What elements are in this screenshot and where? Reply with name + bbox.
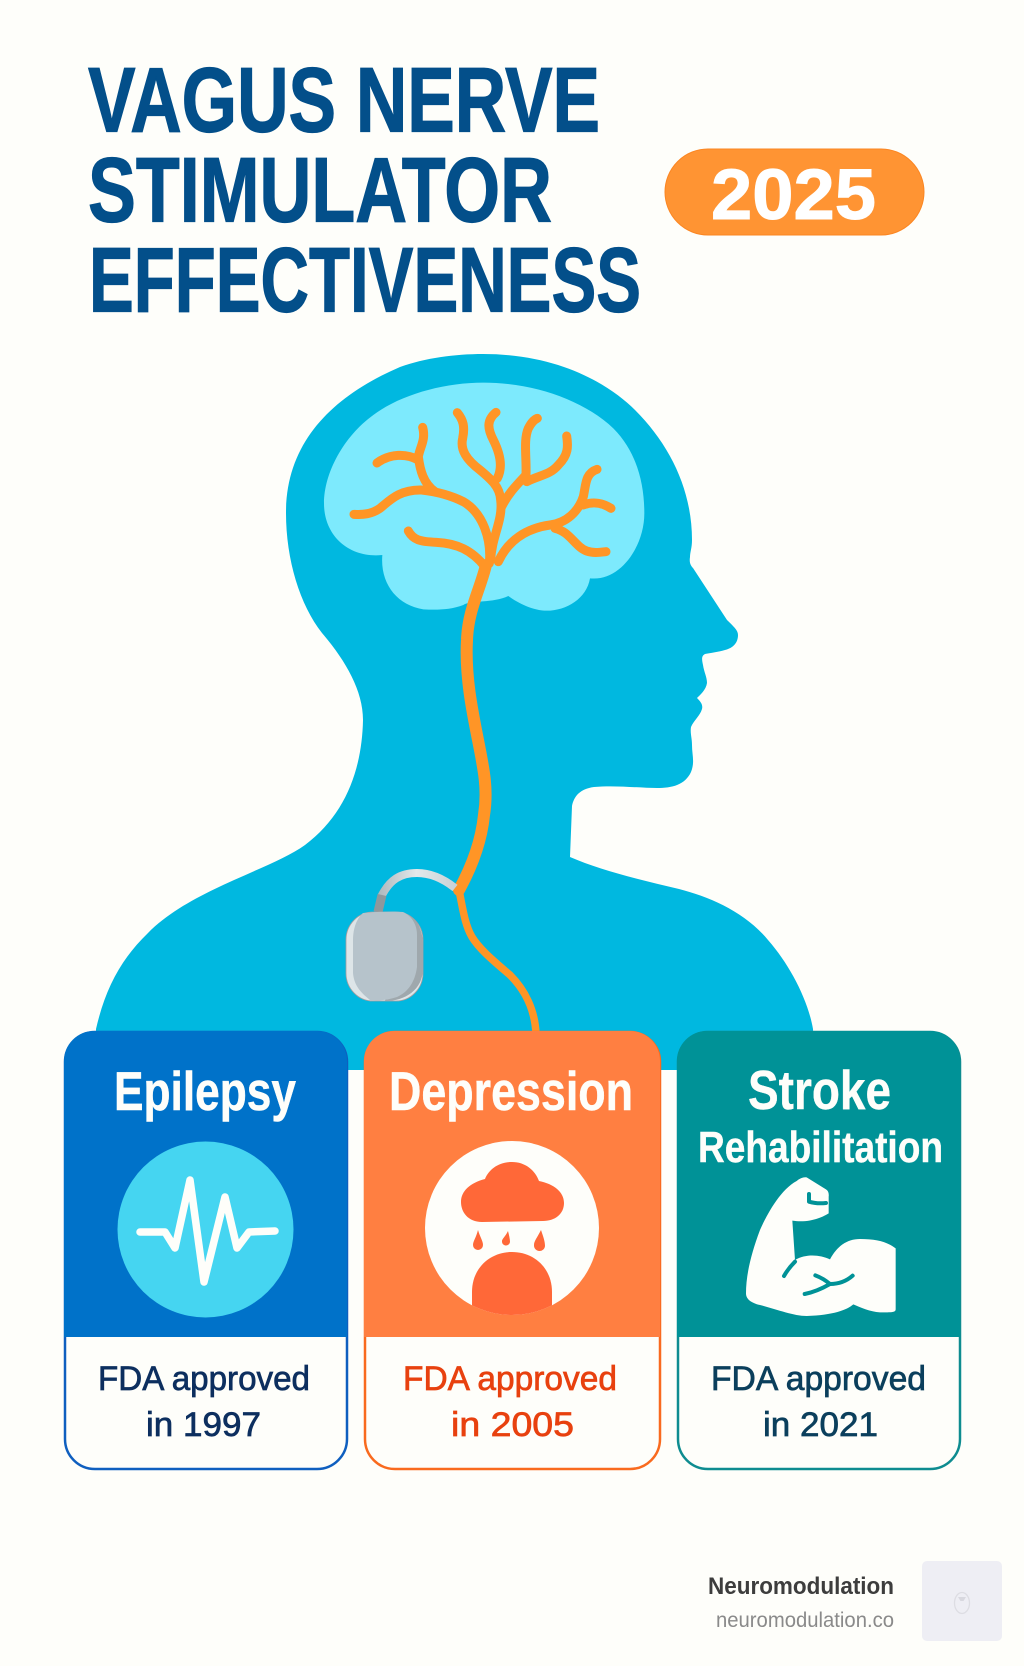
card body xyxy=(365,1032,660,1469)
approval text xyxy=(711,1360,926,1444)
brain xyxy=(324,383,644,611)
footer url: neuromodulation.co xyxy=(716,1609,894,1632)
card header xyxy=(364,1031,660,1337)
card body xyxy=(678,1032,960,1469)
stimulator device xyxy=(346,873,455,1001)
title xyxy=(88,50,641,332)
head and shoulders silhouette xyxy=(96,354,815,1070)
approval text: FDA approved xyxy=(98,1360,310,1398)
condition name: Stroke xyxy=(748,1059,891,1121)
condition name xyxy=(698,1059,943,1172)
title: VAGUS NERVE xyxy=(88,50,600,152)
year badge: 2025 xyxy=(711,156,876,235)
approval text xyxy=(403,1360,617,1444)
approval text: in 2005 xyxy=(451,1406,574,1444)
condition name: Epilepsy xyxy=(114,1060,296,1122)
icon: rain cloud over head xyxy=(425,1141,599,1320)
card header xyxy=(64,1031,347,1337)
condition name: Depression xyxy=(389,1060,633,1122)
approval text xyxy=(98,1360,310,1444)
card body xyxy=(65,1032,347,1469)
card: depression xyxy=(364,1031,660,1469)
footer brand name: Neuromodulation xyxy=(708,1573,894,1600)
title: STIMULATOR xyxy=(88,140,552,242)
approval text: FDA approved xyxy=(711,1360,926,1398)
card: stroke rehabilitation xyxy=(677,1031,960,1469)
icon: heartbeat xyxy=(118,1142,294,1318)
vagus nerve trunk xyxy=(459,565,536,1034)
condition name: Rehabilitation xyxy=(698,1123,943,1172)
year badge xyxy=(665,149,924,235)
card header xyxy=(677,1031,960,1337)
footer logo xyxy=(922,1561,1002,1641)
approval text: FDA approved xyxy=(403,1360,617,1398)
title: EFFECTIVENESS xyxy=(89,230,641,332)
approval text: in 1997 xyxy=(146,1406,261,1444)
icon: flexed arm xyxy=(746,1177,896,1316)
vagus nerve branches xyxy=(354,412,611,567)
card: epilepsy xyxy=(64,1031,347,1469)
approval text: in 2021 xyxy=(763,1406,878,1444)
